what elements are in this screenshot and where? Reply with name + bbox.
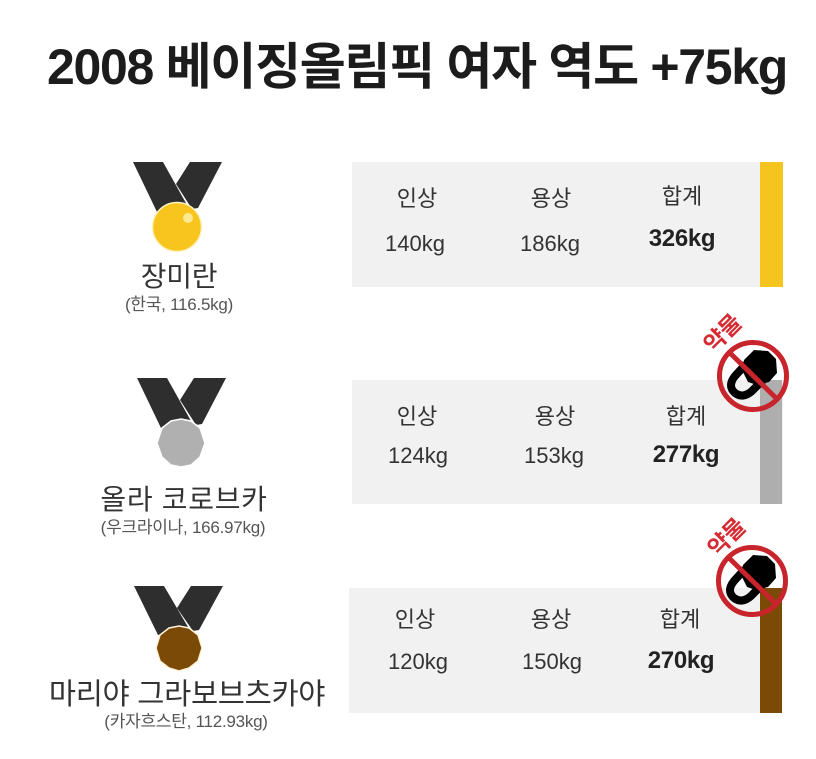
silver athlete name: 올라 코로브카 <box>100 484 268 515</box>
panel: gold row <box>352 162 783 287</box>
bronze clean and jerk: 용상 <box>531 607 571 632</box>
gold snatch <box>385 186 445 256</box>
gold clean and jerk: 용상 <box>531 186 571 211</box>
bronze clean and jerk <box>522 607 582 674</box>
gold clean and jerk <box>520 186 580 256</box>
silver total: 합계 <box>666 404 706 429</box>
bronze snatch <box>388 607 448 674</box>
gold athlete detail: (한국, 116.5kg) <box>125 295 233 314</box>
gold snatch: 인상 <box>397 186 437 211</box>
gold snatch: 140kg <box>385 231 445 256</box>
gold athlete name: 장미란 <box>141 261 217 292</box>
gold bar <box>760 162 783 287</box>
panel: bronze row <box>349 588 782 713</box>
silver clean and jerk <box>524 404 584 468</box>
silver clean and jerk: 용상 <box>535 404 575 429</box>
bronze snatch: 120kg <box>388 649 448 674</box>
bronze athlete detail: (카자흐스탄, 112.93kg) <box>104 712 268 731</box>
bronze total <box>648 607 714 674</box>
bronze clean and jerk: 150kg <box>522 649 582 674</box>
drug label silver: 약물 <box>698 309 747 357</box>
silver snatch: 인상 <box>397 404 437 429</box>
gold total: 합계 <box>662 184 702 209</box>
silver total: 277kg <box>653 441 719 468</box>
gold total <box>649 184 715 252</box>
bronze snatch: 인상 <box>395 607 435 632</box>
silver total <box>653 404 719 468</box>
silver athlete detail: (우크라이나, 166.97kg) <box>101 518 265 537</box>
bronze total: 합계 <box>660 607 700 632</box>
panel: silver row <box>352 380 783 504</box>
bronze total: 270kg <box>648 647 714 674</box>
gold total: 326kg <box>649 225 715 252</box>
silver clean and jerk: 153kg <box>524 443 584 468</box>
drug label bronze: 약물 <box>702 513 751 561</box>
bronze athlete name: 마리야 그라보브츠카야 <box>49 678 325 711</box>
bronze bar <box>760 588 782 713</box>
silver snatch <box>388 404 448 468</box>
silver bar <box>760 380 782 504</box>
title: 2008 베이징올림픽 여자 역도 +75kg <box>47 39 787 95</box>
silver snatch: 124kg <box>388 443 448 468</box>
gold clean and jerk: 186kg <box>520 231 580 256</box>
